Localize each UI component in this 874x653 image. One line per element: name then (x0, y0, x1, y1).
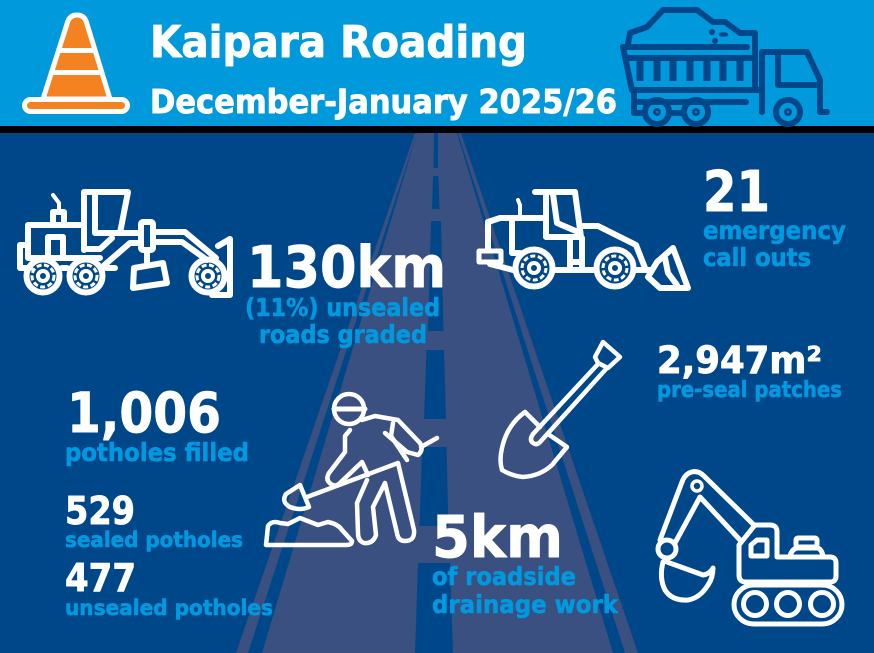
stat: potholes filled: 1,006 (67, 381, 221, 445)
icon: road grader (20, 192, 230, 295)
header rule (0, 126, 874, 133)
stat: unsealed roads graded (245, 235, 446, 349)
icon: excavator (658, 472, 842, 624)
icon: road worker with shovel (266, 394, 437, 545)
stat: potholes filled: potholes filled (65, 438, 249, 467)
title: Kaipara Roading (150, 17, 527, 68)
subtitle: December-January 2025/26 (150, 82, 617, 121)
stat: roadside drainage work: drainage work (432, 590, 619, 619)
icon: dump truck (623, 10, 827, 124)
stat: sealed potholes: sealed potholes (65, 528, 243, 552)
stat: roadside drainage work: of roadside (432, 562, 576, 591)
icon: wheel loader (479, 192, 688, 288)
stat: pre-seal patches (657, 339, 842, 403)
road (236, 133, 638, 653)
stat: unsealed roads graded: roads graded (259, 320, 427, 349)
stat: pre-seal patches: 2,947m² (657, 339, 822, 382)
stat: unsealed potholes: unsealed potholes (65, 596, 273, 620)
stat: sealed potholes: 529 (65, 489, 135, 533)
icon: shovel (500, 342, 620, 477)
stat: unsealed potholes (65, 556, 273, 620)
stat: unsealed roads graded: (11%) unsealed (245, 293, 440, 322)
stat: roadside drainage work (432, 503, 619, 619)
stat: emergency call outs (703, 160, 846, 272)
stat: roadside drainage work: 5km (432, 503, 563, 571)
stat: emergency call outs: call outs (703, 243, 811, 272)
stat: unsealed potholes: 477 (65, 556, 136, 600)
stat: pre-seal patches: pre-seal patches (657, 378, 842, 403)
icon: traffic cone (24, 15, 128, 112)
stat: sealed potholes (65, 489, 243, 552)
stat: unsealed roads graded: 130km (247, 235, 446, 301)
stat: emergency call outs: 21 (703, 160, 770, 225)
header band (0, 0, 874, 127)
stat: emergency call outs: emergency (703, 216, 846, 245)
